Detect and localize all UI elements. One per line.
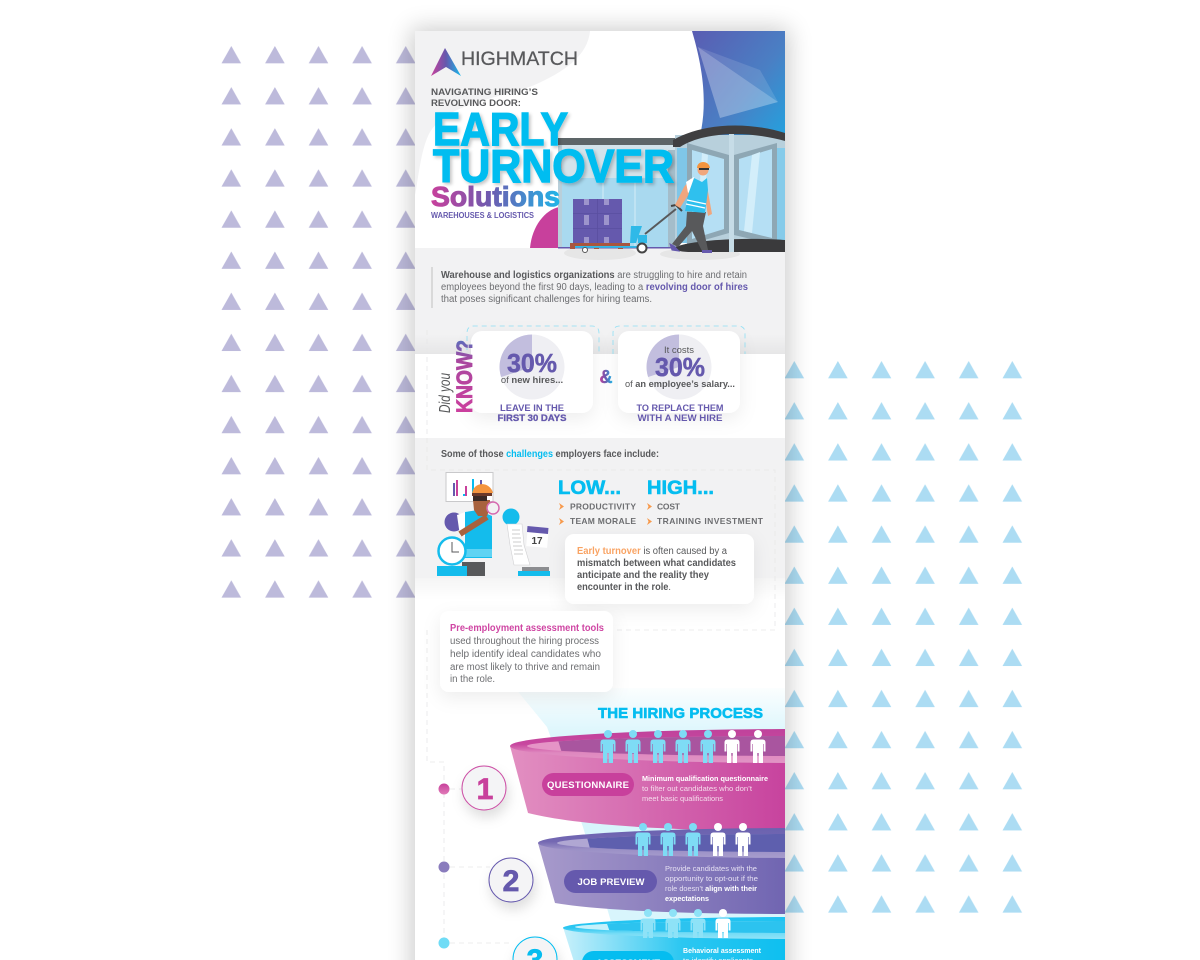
callout: assessment tools: Pre-employment assessment tools [450, 623, 604, 634]
infographic page [415, 31, 785, 960]
funnel rim [510, 729, 1090, 763]
subtitle: REVOLVING DOOR: [431, 98, 521, 109]
pill label: JOB PREVIEW [578, 877, 645, 888]
worker body [457, 484, 493, 576]
list text: TRAINING INVESTMENT [657, 516, 764, 526]
funnel body [510, 746, 800, 831]
stat: 30% [655, 352, 705, 382]
worker [670, 162, 712, 253]
description: to filter out candidates who don’t [642, 784, 753, 793]
pill label [564, 870, 657, 893]
illustration: worker with magnifier [437, 472, 550, 576]
result text [636, 404, 723, 421]
result text: TO REPLACE THEM [636, 403, 724, 413]
callout: early turnover [565, 534, 754, 604]
coin purple [444, 512, 460, 532]
did you know band [415, 348, 785, 582]
step 2 dot [438, 862, 450, 872]
step 3 dot [438, 938, 450, 948]
pallet jack [570, 205, 682, 252]
title: sector: WAREHOUSES & LOGISTICS [431, 211, 535, 220]
caption: of an employee’s salary... [625, 379, 735, 390]
description: opportunity to opt-out if the [665, 874, 758, 883]
callout: assessment tools: are most likely to thrive and remain [450, 662, 600, 673]
floor shadow [564, 248, 636, 260]
building [558, 138, 678, 248]
calendar: 17 [531, 536, 543, 547]
funnel step 2 [538, 823, 1062, 914]
intro text [431, 267, 748, 308]
folder [518, 567, 550, 576]
step 3 number [513, 937, 557, 960]
illustration: revolving door building [530, 125, 785, 260]
title: early turnover: TURNOVER [433, 140, 674, 192]
hiring process cone [515, 688, 785, 925]
logo [431, 48, 578, 76]
description [642, 774, 768, 803]
pie chart [646, 334, 712, 400]
step 2 number [489, 858, 533, 902]
did you know label [438, 340, 472, 413]
low and high lists [558, 477, 764, 526]
pie chart [500, 334, 564, 400]
bullets [559, 503, 652, 525]
list text: PRODUCTIVITY [570, 502, 636, 512]
boxes [573, 199, 622, 243]
callout: early turnover: mismatch between what candidates [577, 558, 736, 569]
logo wordmark: HIGHMATCH [461, 49, 578, 70]
card: cost of replacing [613, 326, 745, 423]
callout: early turnover: Early turnover is often caused by a [577, 546, 727, 557]
callout: early turnover: anticipate and the reality they [577, 570, 709, 581]
result text [498, 404, 566, 422]
description [683, 946, 761, 960]
title: early turnover: EARLY [433, 103, 568, 155]
heading block [431, 87, 674, 220]
pill label [582, 951, 674, 960]
funnel inner [520, 730, 790, 760]
list text [570, 502, 764, 526]
funnel body [538, 843, 800, 914]
funnel body [563, 927, 800, 960]
funnel rim [563, 917, 1037, 939]
did you know label: Did you [437, 373, 454, 413]
callout: assessment tools: in the role. [450, 674, 495, 685]
chart board [446, 472, 493, 502]
funnel step 3 [563, 909, 1037, 960]
header background shapes [415, 31, 785, 354]
description: expectations [665, 894, 709, 903]
people [600, 730, 766, 763]
high heading: HIGH... [647, 477, 714, 499]
background triangle pattern: purple [221, 46, 417, 599]
title: solutions: Solutions [431, 181, 560, 212]
logo mark [431, 48, 461, 76]
callout: early turnover: encounter in the role. [577, 582, 671, 593]
clock [438, 538, 466, 564]
magenta half circle [530, 207, 559, 248]
low heading: LOW... [558, 477, 621, 499]
description: role doesn’t align with their [665, 884, 757, 893]
description: Provide candidates with the [665, 864, 757, 873]
intro text: employees beyond the first 90 days, leading to a revolving door of hires [441, 282, 748, 293]
lead in: It costs [664, 345, 694, 356]
description: Behavioral assessment [683, 946, 761, 955]
door [673, 125, 785, 252]
funnel inner [550, 830, 790, 860]
callout: assessment tools: help identify ideal candidates who [450, 649, 601, 660]
people [640, 909, 730, 942]
intro text: that poses significant challenges for hiring teams. [441, 294, 652, 305]
step 1 number [462, 766, 506, 810]
heading: the hiring process: THE HIRING PROCESS [598, 705, 763, 722]
people [636, 823, 750, 856]
result text: FIRST 30 DAYS [498, 413, 566, 423]
step 1 number: 1 [477, 773, 493, 806]
result text: LEAVE IN THE [500, 403, 564, 413]
dashed outline [467, 326, 599, 354]
card: 30 percent of new hires [467, 326, 599, 423]
dashed decorative lines [427, 330, 775, 943]
subtitle [432, 88, 538, 106]
books [437, 566, 467, 576]
stat: 30% [507, 348, 557, 378]
pill label: QUESTIONNAIRE [547, 780, 629, 791]
magnifier [487, 502, 499, 514]
ampersand: & [600, 367, 612, 387]
list text: COST [657, 502, 681, 512]
did you know label: KNOW? [452, 340, 477, 413]
challenges heading: Some of those challenges employers face include: [441, 449, 659, 460]
list text: TEAM MORALE [570, 516, 636, 526]
funnel step 1 [510, 729, 1090, 831]
funnel rim [538, 828, 1062, 858]
step 1 dot [438, 784, 450, 794]
caption: of new hires... [501, 375, 563, 386]
description [665, 864, 758, 903]
subtitle: NAVIGATING HIRING’S [431, 87, 538, 98]
receipt [507, 524, 530, 565]
page shadow [411, 28, 789, 960]
background triangle pattern: blue [784, 361, 1024, 915]
coin blue [502, 508, 520, 526]
description: Minimum qualification questionnaire [642, 774, 768, 783]
funnel inner [570, 918, 790, 938]
description: meet basic qualifications [642, 794, 723, 803]
step 2 number: 2 [503, 865, 519, 898]
result text: WITH A NEW HIRE [638, 413, 722, 423]
intro text: Warehouse and logistics organizations are struggling to hire and retain [441, 270, 747, 281]
pill label [542, 773, 634, 796]
title: early turnover [432, 112, 676, 187]
dashed outline [613, 326, 745, 354]
callout: assessment tools [440, 611, 613, 692]
callout: assessment tools: used throughout the hiring process [450, 636, 599, 647]
